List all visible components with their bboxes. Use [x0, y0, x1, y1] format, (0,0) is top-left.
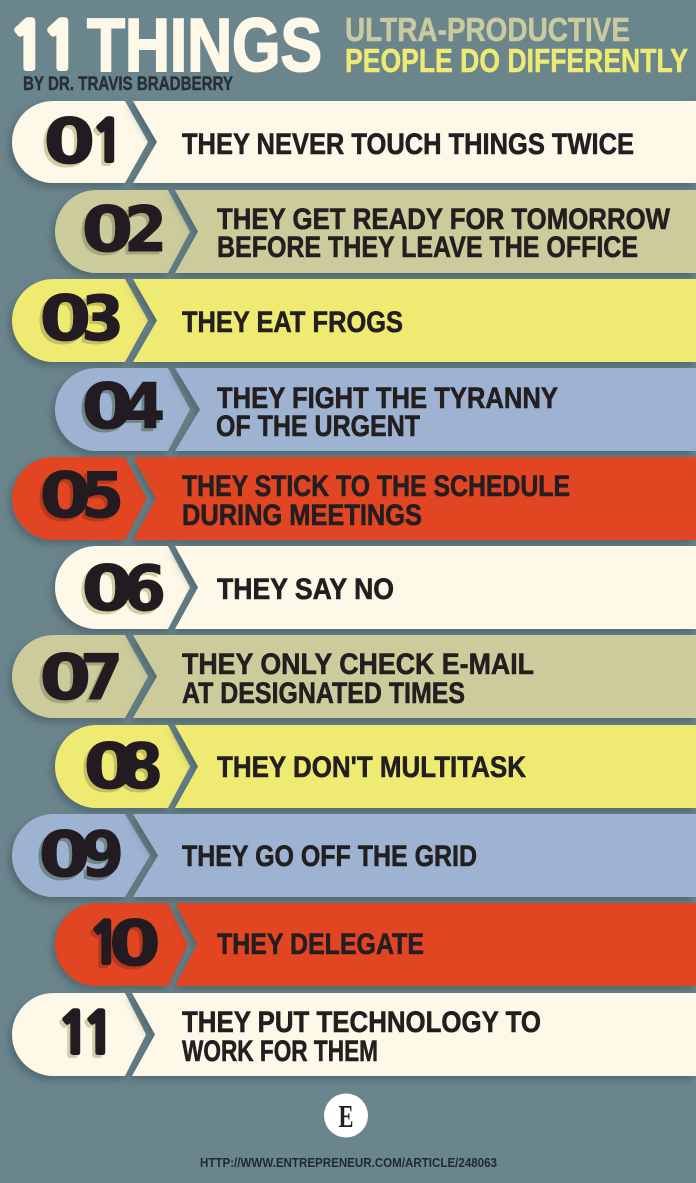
number 07: 7	[80, 641, 123, 714]
title: 11 things: THINGS	[87, 3, 322, 87]
text 05	[182, 470, 570, 532]
number 11: 1	[57, 1007, 91, 1062]
row 03	[12, 279, 696, 362]
number 04	[82, 370, 165, 443]
number 05: 0	[40, 460, 91, 532]
row 10	[55, 903, 696, 986]
number 08: 0	[84, 731, 135, 803]
source url: HTTP://WWW.ENTREPRENEUR.COM/ARTICLE/248063	[200, 1156, 497, 1170]
number 06	[82, 552, 166, 625]
icon: entrepreneur logo	[324, 1094, 368, 1138]
subtitle line 1: ULTRA-PRODUCTIVE	[345, 11, 630, 48]
text 04	[216, 382, 558, 443]
number 10: 1	[88, 917, 122, 972]
row 05	[12, 457, 696, 540]
number 02: 2	[124, 193, 167, 266]
number 05: 5	[81, 459, 124, 532]
row 09	[12, 814, 696, 897]
text 07	[182, 648, 534, 710]
number 06: 6	[123, 552, 166, 625]
icon: entrepreneur logo: E	[338, 1098, 354, 1134]
row 01	[12, 101, 696, 183]
text 06: THEY SAY NO	[217, 573, 394, 606]
number 10: 0	[109, 908, 161, 980]
row 07	[12, 635, 696, 718]
number 01: 0	[44, 106, 95, 178]
number 09: 0	[38, 819, 90, 891]
row 04	[55, 368, 696, 451]
text 09: THEY GO OFF THE GRID	[182, 840, 477, 873]
row 06	[55, 546, 696, 629]
row 11	[12, 993, 696, 1076]
text 11: THEY PUT TECHNOLOGY TO	[182, 1006, 541, 1039]
number 01: 1	[91, 115, 125, 170]
number 02	[82, 193, 167, 266]
text 11: WORK FOR THEM	[182, 1035, 378, 1068]
text 05: DURING MEETINGS	[182, 499, 422, 532]
text 02	[217, 203, 670, 264]
text 04: THEY FIGHT THE TYRANNY	[217, 382, 558, 415]
text 05: THEY STICK TO THE SCHEDULE	[182, 470, 570, 503]
number 01	[44, 106, 125, 178]
number 07	[40, 641, 123, 714]
number 08	[84, 730, 163, 803]
text 11	[182, 1006, 541, 1068]
row 08	[55, 725, 696, 808]
number 07: 0	[40, 642, 91, 714]
text 04: OF THE URGENT	[216, 410, 420, 443]
number 03	[40, 282, 124, 355]
number 03: 3	[81, 282, 124, 355]
number 09	[38, 818, 124, 891]
text 03: THEY EAT FROGS	[182, 306, 403, 339]
number 08: 8	[120, 730, 163, 803]
text 07: THEY ONLY CHECK E-MAIL	[182, 648, 534, 681]
number 09: 9	[81, 818, 124, 891]
number 06: 0	[82, 553, 133, 625]
number 11: 1	[82, 1007, 116, 1062]
text 10: THEY DELEGATE	[217, 928, 424, 961]
title: 11 things	[8, 3, 322, 87]
number 03: 0	[40, 283, 91, 355]
number 11	[57, 1007, 116, 1062]
text 07: AT DESIGNATED TIMES	[182, 677, 465, 710]
row 02	[55, 190, 696, 273]
byline: BY DR. TRAVIS BRADBERRY	[23, 74, 233, 95]
number 02: 0	[82, 194, 133, 266]
text 08: THEY DON'T MULTITASK	[217, 751, 527, 784]
number 04: 4	[122, 370, 165, 443]
text 01: THEY NEVER TOUCH THINGS TWICE	[182, 128, 634, 161]
number 04: 0	[82, 371, 133, 443]
title: 11 things: 11	[8, 14, 80, 78]
number 05	[40, 459, 124, 532]
